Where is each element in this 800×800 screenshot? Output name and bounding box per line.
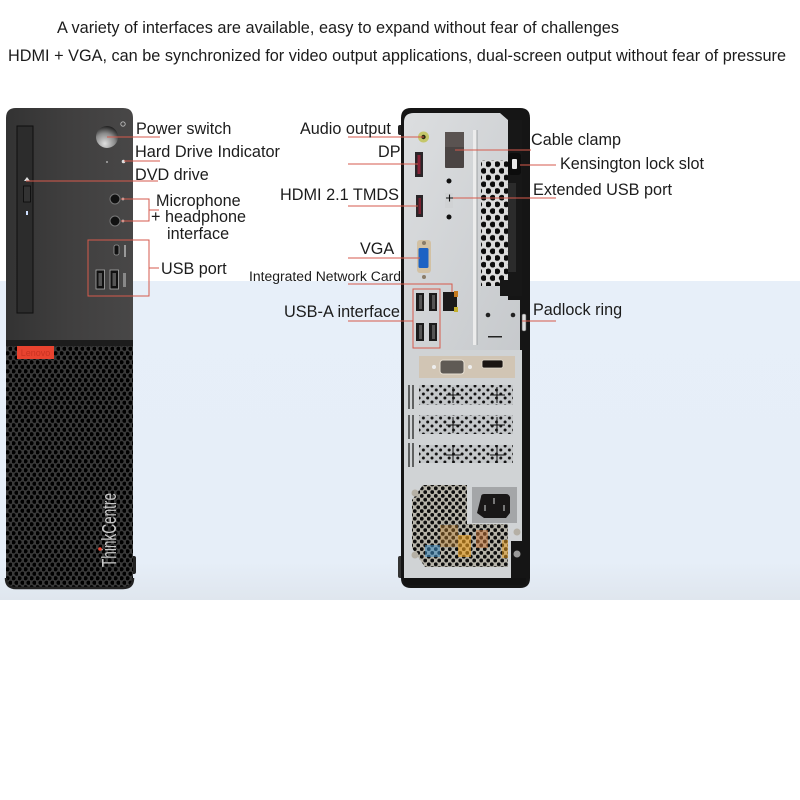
front label: power switch: Power switch <box>136 120 231 138</box>
front tower <box>6 108 136 588</box>
padlock ring <box>522 314 526 331</box>
DVD bay <box>17 126 33 313</box>
lower bracket holes <box>486 313 515 338</box>
heading line 1: A variety of interfaces are available, easy to expand without fear of challenges <box>57 19 619 37</box>
rear label: VGA: VGA <box>360 240 394 258</box>
expansion slot covers <box>409 385 513 467</box>
VGA port <box>417 240 431 279</box>
front label: hard drive indicator: Hard Drive Indicator <box>135 143 281 161</box>
vent grid <box>481 160 508 286</box>
PSU vent <box>412 485 508 567</box>
rear label: extended USB port: Extended USB port <box>533 181 672 199</box>
front label: DVD drive: DVD drive <box>135 166 209 184</box>
rear label: cable clamp: Cable clamp <box>531 131 621 149</box>
HDMI port <box>416 195 423 217</box>
audio jack <box>418 132 429 142</box>
USB ports <box>96 245 126 289</box>
rear chassis <box>398 125 403 135</box>
rear label: DP: DP <box>378 143 400 161</box>
tower mesh grille <box>6 345 133 588</box>
rear label: USB-A interface: USB-A interface <box>284 303 400 321</box>
extended USB knockout <box>445 178 453 220</box>
rear upper plate <box>404 113 520 358</box>
front label: USB port: USB port <box>161 260 227 278</box>
rear lower plate <box>404 350 522 578</box>
callout lines <box>26 137 556 348</box>
ThinkCentre logo: ThinkCentre <box>99 493 121 567</box>
DVD eject button <box>24 177 30 215</box>
heading line 2: HDMI + VGA, can be synchronized for video output applications, dual-screen output without fear of pressure <box>8 47 786 65</box>
power button <box>96 126 118 148</box>
rear label: audio output: Audio output <box>300 120 391 138</box>
rear label: HDMI: HDMI 2.1 TMDS <box>280 186 399 204</box>
Kensington lock slot <box>508 153 521 175</box>
red Lenovo badge <box>17 346 54 359</box>
DP port <box>415 152 423 177</box>
cable clamp block <box>445 132 464 168</box>
background panel <box>0 281 800 600</box>
network port <box>443 291 458 312</box>
front label: microphone and headphone <box>151 192 246 243</box>
rear label: Kensington lock slot: Kensington lock slot <box>560 155 704 173</box>
rear tower <box>398 108 530 588</box>
front label: microphone and headphone: Microphone <box>156 192 241 210</box>
USB-A ports <box>416 293 437 341</box>
front label: microphone and headphone: + headphone <box>151 208 246 226</box>
rear label: padlock ring: Padlock ring <box>533 301 622 319</box>
drive indicators <box>106 161 108 163</box>
audio jacks <box>110 194 124 226</box>
power socket <box>472 487 517 523</box>
red Lenovo badge: Lenovo <box>21 348 50 358</box>
front label: microphone and headphone: interface <box>167 225 229 243</box>
tower upper body <box>6 108 133 346</box>
rear label: integrated network card: Integrated Network Card <box>249 269 401 284</box>
video expansion card <box>419 356 515 378</box>
tower foot <box>130 556 136 574</box>
plate rail <box>473 130 477 345</box>
